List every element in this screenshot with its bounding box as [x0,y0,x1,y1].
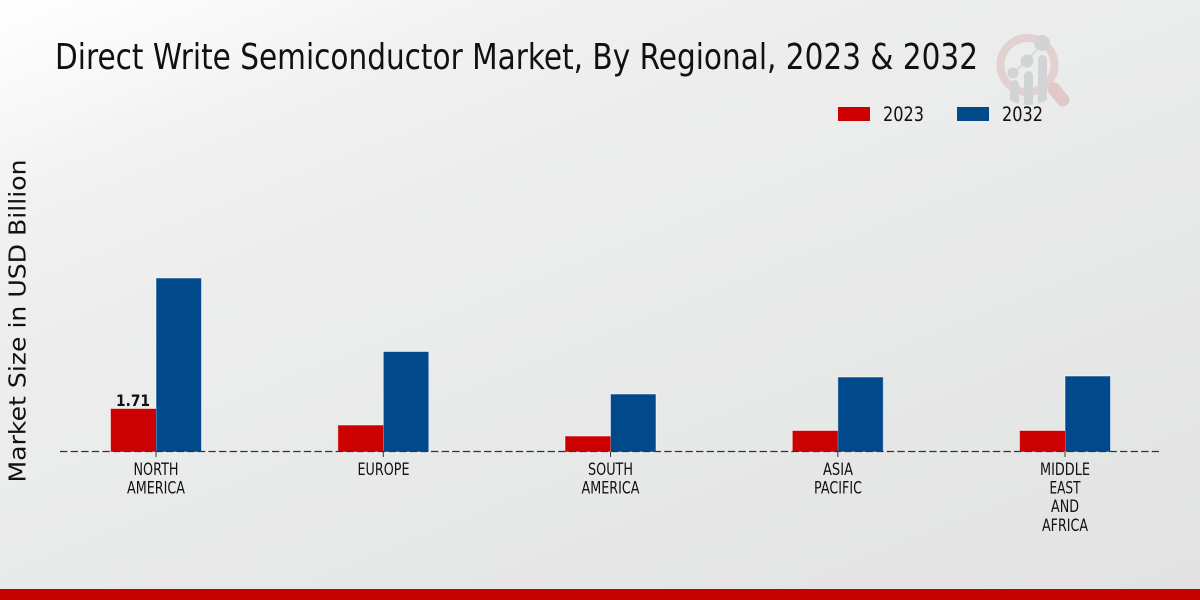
label: Europe: EUROPE [358,460,410,479]
label: North America: NORTH [134,460,178,479]
label: South America [582,460,640,498]
label: Middle East and Africa: AND [1051,497,1079,516]
label: Asia Pacific: ASIA [823,460,854,479]
bars: Asia Pacific [792,377,883,452]
data label: 1.71 [116,391,150,410]
title: Direct Write Semiconductor Market, By Regional, 2023 & 2032 [55,37,978,78]
bars: North America [110,278,202,452]
label: Middle East and Africa: EAST [1050,478,1081,498]
legend item: 2023: 2023 [883,103,924,126]
bars: Middle East and Africa [1020,376,1110,452]
label: Middle East and Africa: MIDDLE [1040,460,1090,479]
axis baseline [60,452,1159,457]
bars: South America [565,394,656,452]
legend item: 2023 [838,103,924,126]
legend item: 2032 [957,103,1043,126]
legend item: 2032: 2032 [1002,103,1043,126]
label: North America [127,460,186,498]
label: South America: AMERICA [582,478,640,498]
label: Middle East and Africa [1040,460,1090,535]
label: North America: AMERICA [127,478,186,498]
bar chart [60,278,1159,457]
label: South America: SOUTH [588,460,633,479]
legend [838,103,1043,126]
label: Asia Pacific: PACIFIC [814,478,862,498]
y-axis title: Market Size in USD Billion [6,160,32,482]
bars: Europe [338,352,429,452]
label: Middle East and Africa: AFRICA [1042,516,1089,535]
label: Asia Pacific [814,460,862,498]
icon: watermark logo [1000,35,1063,110]
category labels [127,460,1090,535]
footer bar [0,589,1200,600]
